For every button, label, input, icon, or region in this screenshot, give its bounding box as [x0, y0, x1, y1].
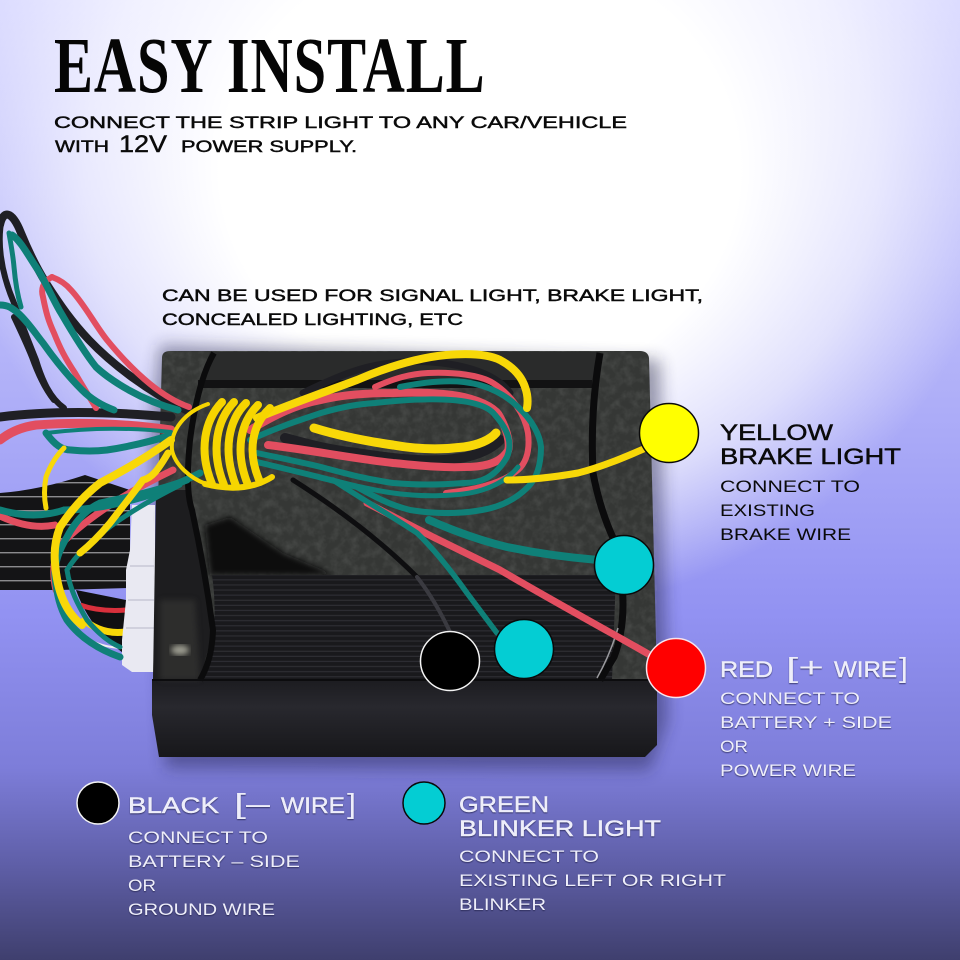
label: green blinker light: EXISTING LEFT OR RIGHT — [459, 871, 726, 890]
label: black minus wire: BLACK — [128, 793, 219, 818]
label: yellow brake light: EXISTING — [720, 501, 815, 520]
label: red plus wire: [+ — [786, 652, 824, 683]
wires: black — [0, 215, 510, 632]
label: black minus wire: ] — [347, 788, 356, 819]
label: red plus wire: WIRE — [834, 657, 897, 682]
control box — [152, 351, 657, 757]
label: green blinker light: BLINKER LIGHT — [459, 816, 661, 841]
wires: red — [0, 277, 650, 655]
label: red plus wire: ] — [899, 652, 908, 683]
label: yellow brake light — [720, 420, 901, 544]
marker: green wire upper — [594, 536, 654, 594]
usage note: CAN BE USED FOR SIGNAL LIGHT, BRAKE LIGHT, — [162, 287, 703, 305]
legend marker: black — [77, 782, 119, 824]
wires: yellow — [44, 354, 646, 625]
intro text — [54, 114, 627, 158]
white connector — [122, 505, 155, 672]
label: black minus wire: GROUND WIRE — [128, 900, 275, 919]
label: green blinker light: BLINKER — [459, 895, 546, 914]
legend marker: green — [403, 782, 445, 824]
marker: black wire — [420, 632, 480, 690]
box shadow — [150, 345, 668, 770]
intro text: WITH — [55, 138, 109, 156]
label: yellow brake light: CONNECT TO — [720, 477, 860, 496]
intro text: 12V — [119, 131, 167, 158]
label: black minus wire: OR — [128, 876, 156, 895]
label: red plus wire: RED — [720, 657, 773, 682]
yellow wire knot — [172, 402, 272, 488]
label: red plus wire: CONNECT TO — [720, 689, 860, 708]
label: red plus wire — [720, 652, 908, 780]
label: green blinker light: GREEN — [459, 792, 549, 817]
left wire cable bundle — [0, 475, 130, 655]
label: yellow brake light: BRAKE LIGHT — [720, 444, 901, 469]
label: yellow brake light: BRAKE WIRE — [720, 525, 851, 544]
label: red plus wire: POWER WIRE — [720, 761, 856, 780]
usage note — [162, 287, 703, 329]
label: black minus wire: BATTERY – SIDE — [128, 852, 300, 871]
label: black minus wire: WIRE — [281, 793, 345, 818]
label: black minus wire: [– — [234, 788, 271, 819]
marker: red wire — [646, 638, 706, 698]
label: black minus wire: CONNECT TO — [128, 828, 268, 847]
intro text: CONNECT THE STRIP LIGHT TO ANY CAR/VEHICLE — [54, 114, 627, 132]
title: EASY INSTALL — [54, 23, 485, 110]
label: green blinker light: CONNECT TO — [459, 847, 599, 866]
marker: green wire lower — [494, 620, 554, 678]
marker: yellow wire — [640, 404, 698, 462]
label: green blinker light — [459, 792, 726, 914]
wires: green — [0, 233, 598, 657]
label: red plus wire: BATTERY + SIDE — [720, 713, 892, 732]
label: yellow brake light: YELLOW — [720, 420, 833, 445]
label: red plus wire: OR — [720, 737, 748, 756]
intro text: POWER SUPPLY. — [181, 138, 357, 156]
label: black minus wire — [128, 788, 356, 919]
usage note: CONCEALED LIGHTING, ETC — [162, 311, 463, 329]
